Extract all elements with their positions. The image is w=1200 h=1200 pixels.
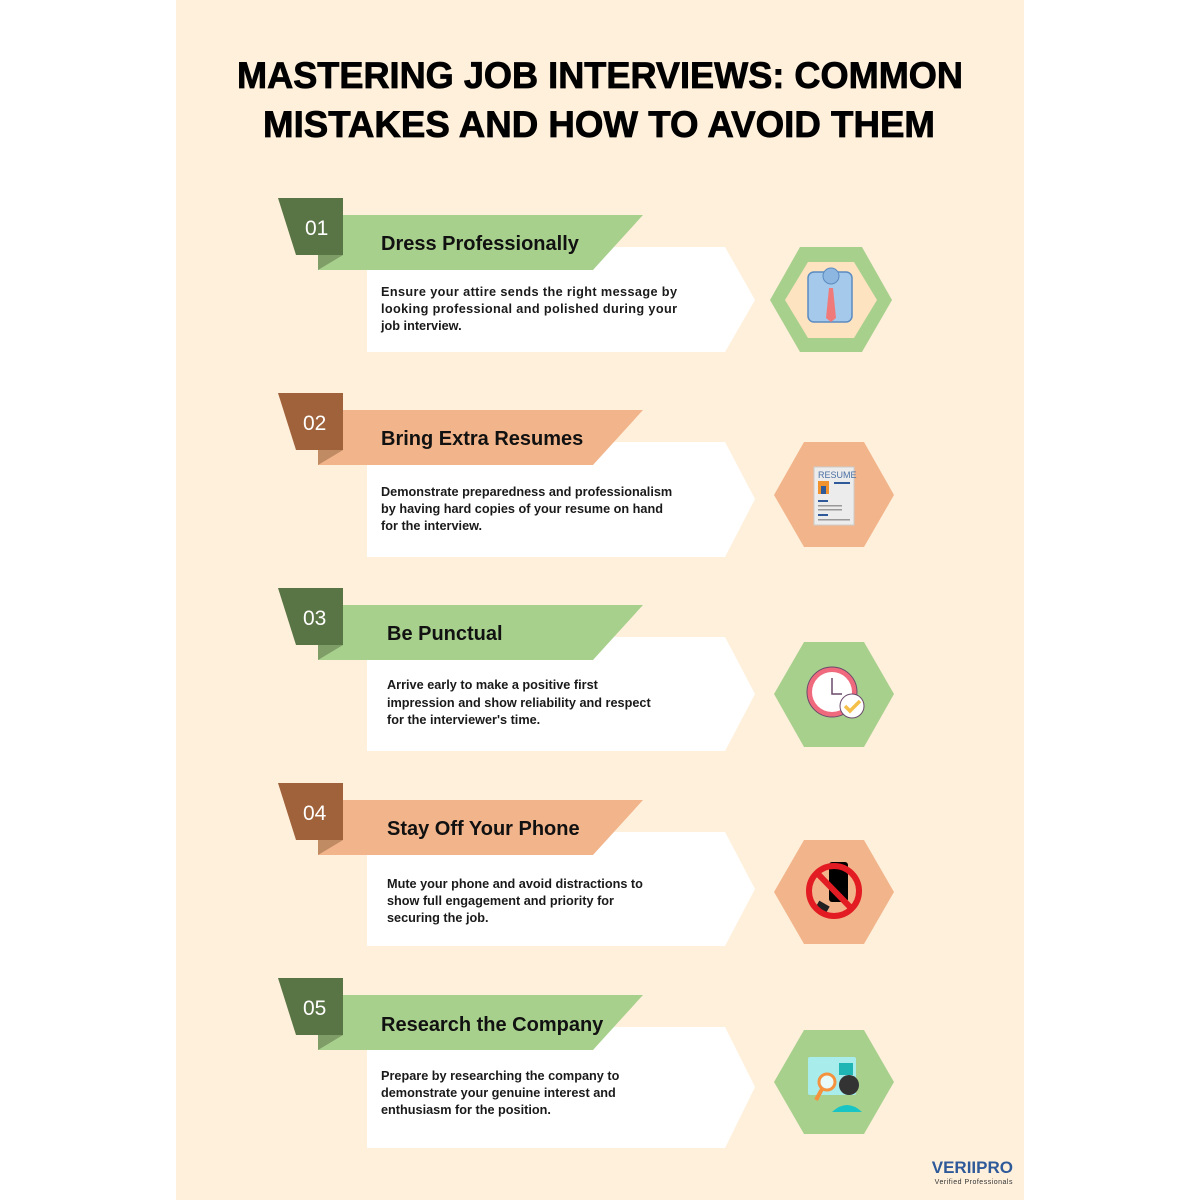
item 01: Dress Professionally [278,198,892,352]
item 05: Research the Company: demonstrate your genuine interest and [381,1086,616,1100]
logo: VERIIPRO [932,1158,1013,1186]
item 04: Stay Off Your Phone: show full engagement and priority for [387,894,614,908]
item 04: Stay Off Your Phone: securing the job. [387,911,489,925]
item 03: Be Punctual [278,588,894,751]
item 04: Stay Off Your Phone: Mute your phone and avoid distractions to [387,877,643,891]
item 03: Be Punctual: Arrive early to make a positive first [387,678,599,692]
item 04: Stay Off Your Phone: 04 [303,802,327,825]
icon: no phone hexagon [774,840,894,944]
logo: VERIIPRO: Verified Professionals [935,1179,1013,1186]
icon: shirt hexagon [770,247,892,352]
icon: clock hexagon [774,642,894,747]
item 05: Research the Company: 05 [303,997,326,1020]
item 05: Research the Company: Prepare by researching the company to [381,1069,620,1083]
item 03: Be Punctual: 03 [303,607,326,630]
item 04: Stay Off Your Phone [278,783,894,946]
item 05: Research the Company: enthusiasm for the position. [381,1103,551,1117]
item 03: Be Punctual: Be Punctual [387,623,503,645]
title: MASTERING JOB INTERVIEWS: COMMON [237,55,963,96]
item 03: Be Punctual: impression and show reliability and respect [387,696,651,710]
item 02: Bring Extra Resumes: for the interview. [381,519,482,533]
item 04: Stay Off Your Phone: Stay Off Your Phone [387,818,580,840]
item 02: Bring Extra Resumes [278,393,894,557]
item 01: Dress Professionally: Dress Professionally [381,233,580,255]
item 03: Be Punctual: for the interviewer's time. [387,713,540,727]
title [237,55,963,145]
icon: research hexagon [774,1030,894,1134]
icon: resume hexagon: RESUME [818,470,857,480]
background panel [176,0,1024,1200]
item 02: Bring Extra Resumes: Demonstrate preparedness and professionalism [381,485,672,499]
title: MISTAKES AND HOW TO AVOID THEM [263,104,935,145]
logo: VERIIPRO: VERIIPRO [932,1158,1013,1177]
icon: resume hexagon [774,442,894,547]
item 02: Bring Extra Resumes: Bring Extra Resumes [381,428,583,450]
item 02: Bring Extra Resumes: by having hard copies of your resume on hand [381,502,663,516]
item 01: Dress Professionally: 01 [305,217,328,240]
item 02: Bring Extra Resumes: 02 [303,412,326,435]
item 01: Dress Professionally: Ensure your attire sends the right message by [381,285,677,299]
item 05: Research the Company: Research the Company [381,1014,604,1036]
item 01: Dress Professionally: job interview. [380,319,462,333]
item 01: Dress Professionally: looking professional and polished during your [381,302,677,316]
item 05: Research the Company [278,978,894,1148]
